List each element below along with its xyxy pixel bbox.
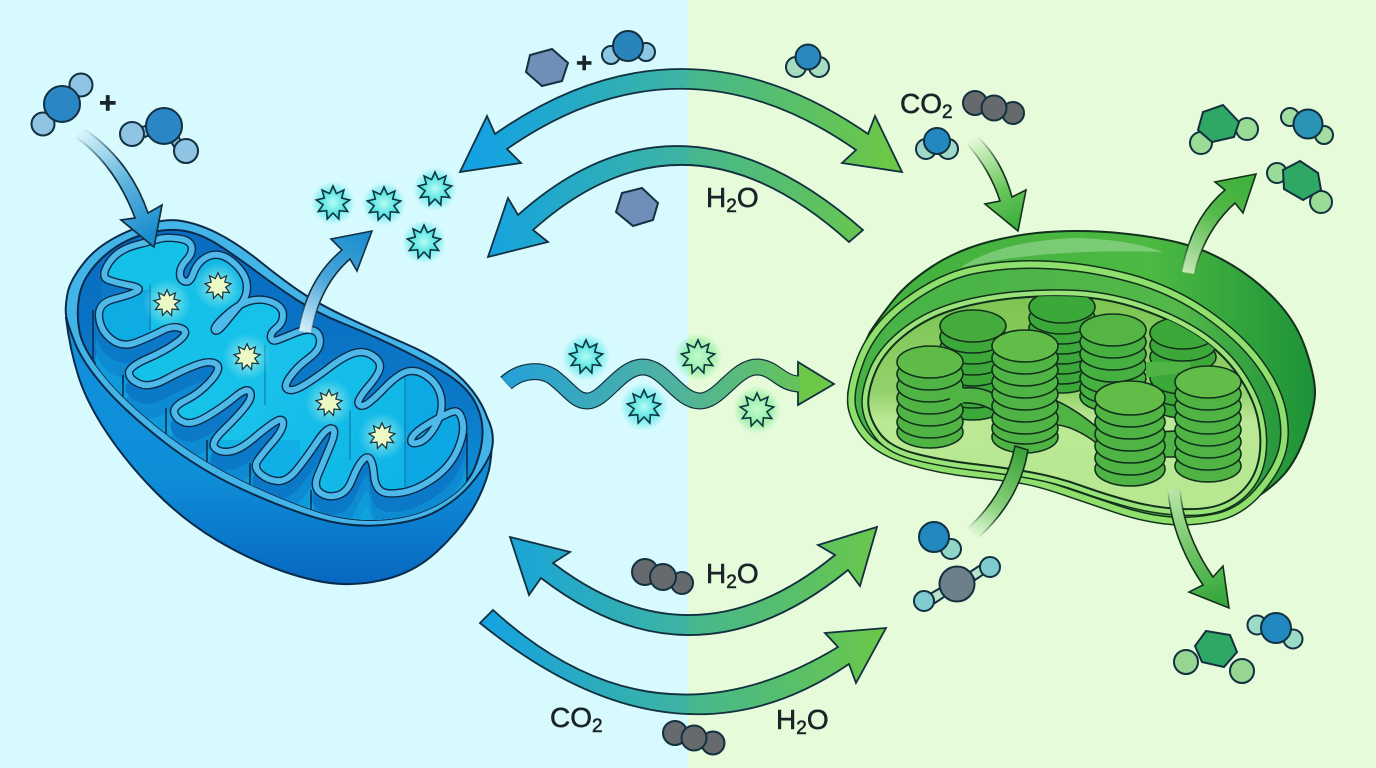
lamella: left link edges <box>963 386 994 412</box>
outer membrane ring <box>851 265 1284 521</box>
granum: back centre <box>1029 291 1095 393</box>
label: H2O bottom: H <box>776 704 796 735</box>
background: left blue half <box>0 0 688 768</box>
arrow: out of chloroplast bottom <box>1168 490 1229 608</box>
label: H2O lower centre: H <box>706 558 726 589</box>
lamella: right link <box>1164 430 1176 458</box>
molecule: carbon dioxide lower centre <box>632 559 693 594</box>
granum: back left <box>940 310 1006 420</box>
label: CO2 top right: 2 <box>942 102 953 123</box>
chloroplast highlight <box>960 238 1163 268</box>
arrow: second top arrow to the left <box>488 146 863 257</box>
wave star 4 <box>733 386 781 434</box>
molecule: carbon dioxide bottom <box>663 721 724 754</box>
label: H2O lower centre: 2 <box>726 572 737 593</box>
molecule: water top right of centre <box>786 44 829 77</box>
grana stacks <box>897 291 1241 486</box>
chloroplast <box>848 231 1315 523</box>
cristae walls <box>92 258 468 520</box>
label: CO2 bottom: CO <box>550 702 592 733</box>
label: H2O upper: 2 <box>726 196 737 217</box>
molecule: carbon dioxide top right <box>963 91 1024 124</box>
arrow: bottom arrow to the right <box>480 610 886 714</box>
label: CO2 bottom: 2 <box>592 716 603 737</box>
arrow: out of chloroplast lower left <box>968 446 1028 538</box>
ATP star cluster <box>311 167 457 264</box>
inner cavity <box>78 230 483 520</box>
label: CO2 top right: CO <box>900 88 942 119</box>
wavy energy arrow <box>506 362 834 405</box>
molecule: water far top right <box>1281 108 1333 144</box>
inner membrane ring <box>868 296 1260 509</box>
arrow: ATP out of mitochondrion <box>299 231 372 333</box>
granum: front lower <box>1095 381 1165 486</box>
ATP stars in the matrix <box>143 262 406 460</box>
molecule: water by CO2 <box>916 128 958 159</box>
granum: upper right <box>1080 314 1146 412</box>
molecule: green hexagon bottom <box>1174 631 1254 683</box>
chloroplast outer body <box>848 231 1315 523</box>
molecule: green hexagon top right <box>1190 105 1258 154</box>
granum: front right <box>1175 366 1241 482</box>
mitochondrion <box>66 220 493 586</box>
mitochondrion cavity and cristae <box>76 228 484 521</box>
wave star 1 <box>562 333 610 381</box>
label: H2O upper: O <box>737 182 759 213</box>
arrow: into chloroplast <box>968 136 1026 231</box>
hexagon molecule top <box>526 49 568 86</box>
inner membrane <box>99 238 463 496</box>
molecule: water upper left <box>32 74 92 136</box>
lamella: left link <box>950 388 993 408</box>
molecule: methane style with bonds <box>914 557 1000 611</box>
molecule: water bottom right of chloroplast <box>919 522 961 559</box>
background: right green half <box>688 0 1376 768</box>
label: H2O upper: H <box>706 182 726 213</box>
arrow: out of chloroplast top <box>1182 174 1256 274</box>
hexagon molecule centre <box>616 188 658 226</box>
mitochondrion outer body <box>66 318 492 584</box>
granum: back right <box>1150 317 1216 418</box>
cristae lumen <box>99 238 463 496</box>
wave star 2 <box>674 333 722 381</box>
mitochondrion outer rim <box>66 220 493 526</box>
granum: front centre <box>992 330 1058 453</box>
arrow: top exchange double headed <box>460 69 902 172</box>
wave star 3 <box>620 383 668 431</box>
granum: front left <box>897 346 963 448</box>
label: H2O bottom: O <box>807 704 829 735</box>
label: H2O bottom: 2 <box>796 718 807 739</box>
plus sign top: + <box>576 47 592 78</box>
arrow: lower double headed <box>510 527 877 635</box>
molecule: green hexagon right <box>1267 161 1332 213</box>
lamella: centre to front link <box>1056 400 1096 443</box>
arrow: substrates into mitochondrion <box>77 128 162 247</box>
plus sign upper left: + <box>99 87 117 120</box>
stroma <box>868 296 1260 509</box>
molecule: water top centre <box>602 31 655 64</box>
molecule: water with bonds <box>120 108 198 163</box>
lamella: upper right link <box>1146 362 1190 378</box>
molecule: water bottom right <box>1248 613 1302 648</box>
label: H2O lower centre: O <box>737 558 759 589</box>
